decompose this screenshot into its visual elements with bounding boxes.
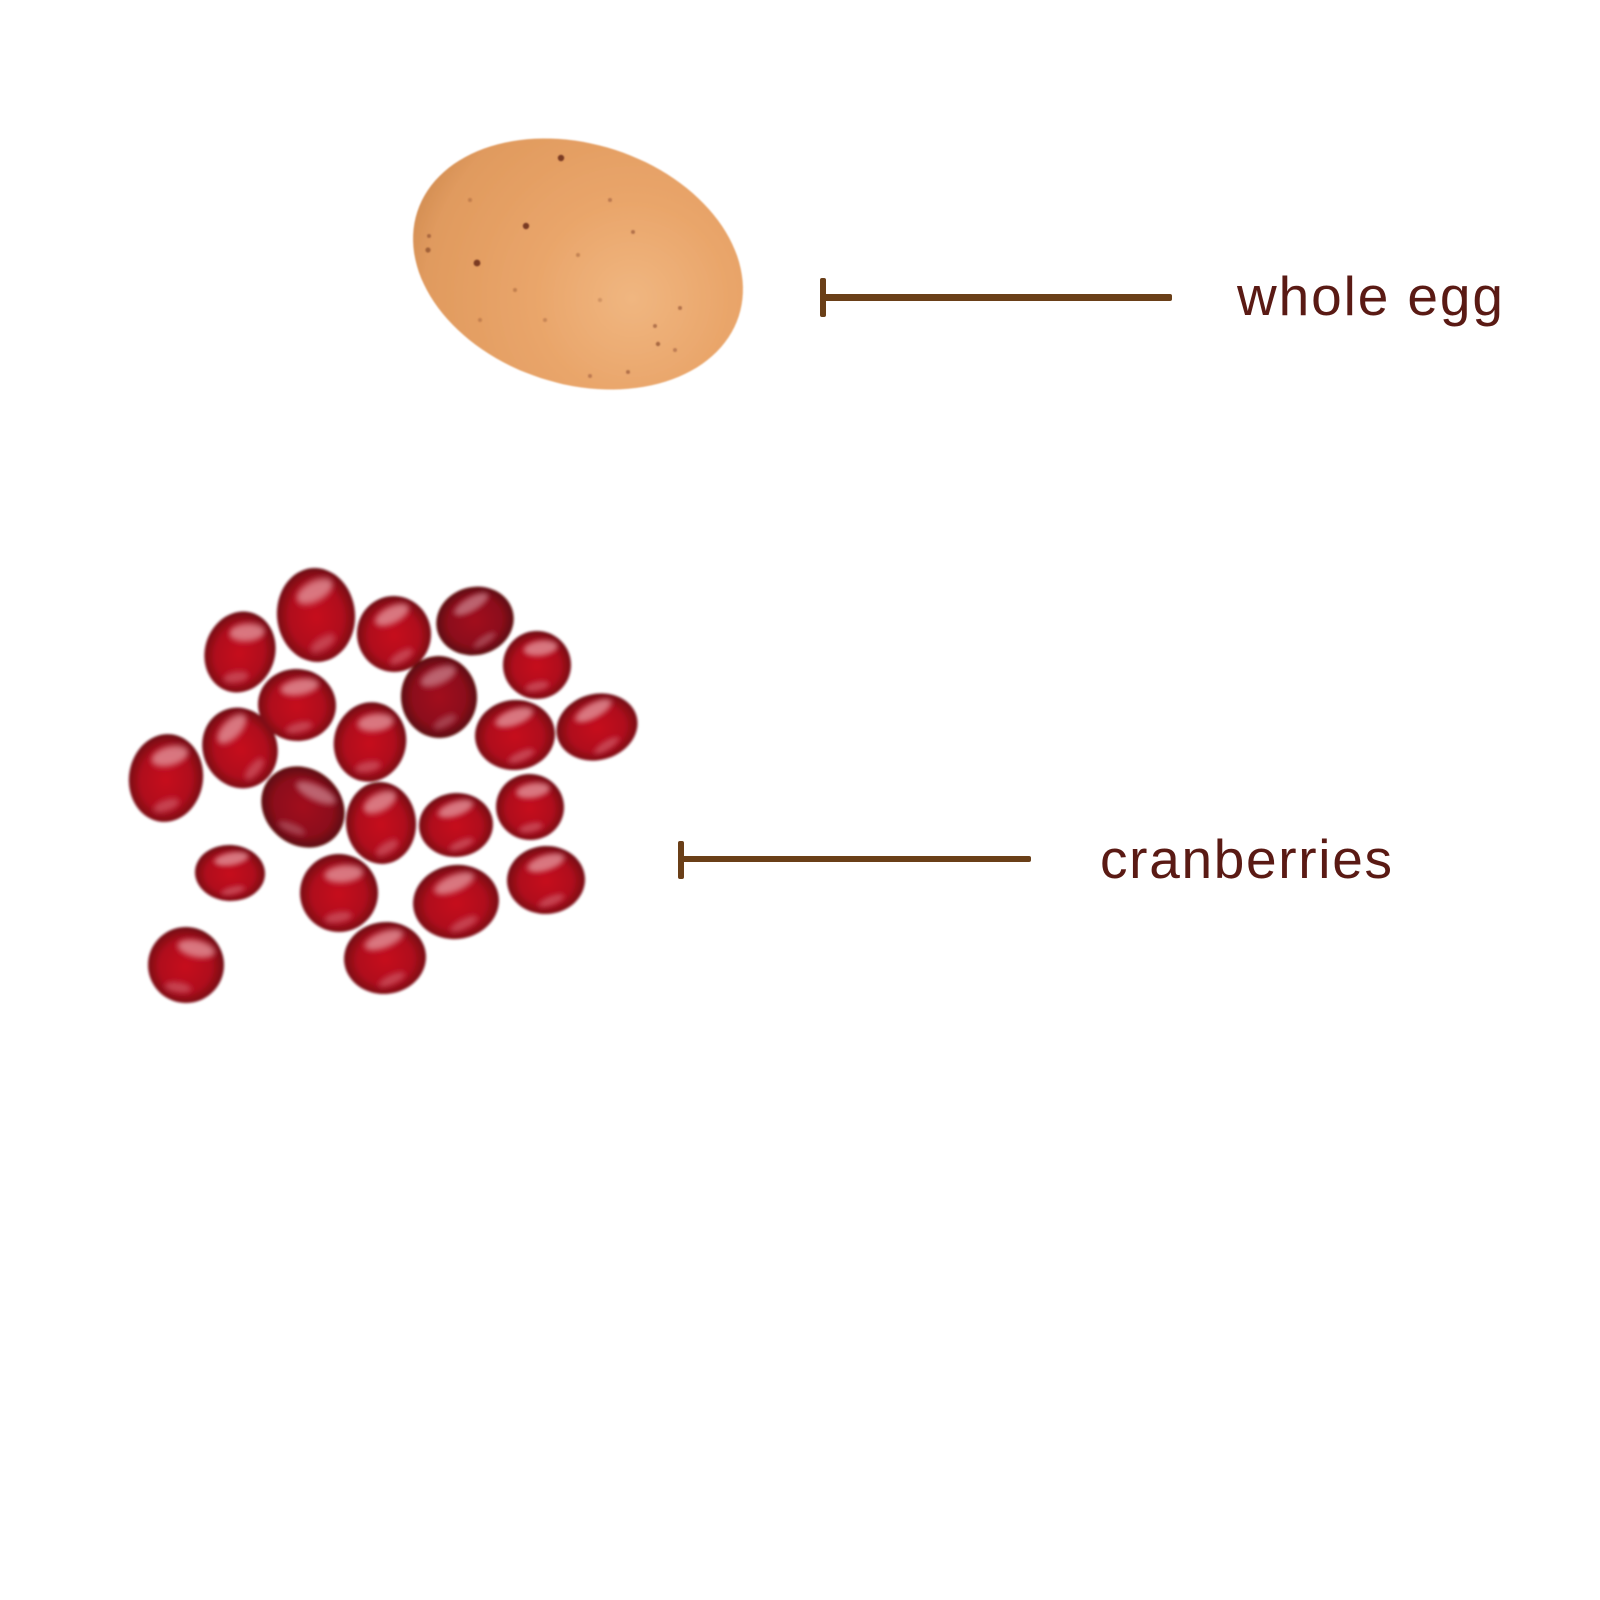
berry [293,847,385,939]
berry [408,859,504,945]
berry [134,913,238,1017]
leader line: whole egg [820,278,1172,317]
berry [123,729,209,827]
label: whole egg: whole egg [1236,265,1503,327]
icon: cranberries cluster [123,565,645,1017]
berry [498,626,576,704]
berry [472,697,558,773]
berry [352,591,436,677]
dark berry [398,653,480,741]
berry [549,685,645,769]
label: cranberries: cranberries [1100,828,1392,890]
egg speckles [425,155,682,378]
dark berry [245,750,361,864]
berry [325,694,415,790]
berry [492,770,568,844]
berry [340,918,430,998]
berry [343,779,419,867]
berry [189,695,291,801]
berry [194,602,286,702]
dark berry [429,578,521,664]
icon: whole egg [380,98,776,430]
berry [505,844,587,916]
berry [254,665,340,745]
berry [194,843,266,903]
berry [273,565,359,665]
berry [417,790,495,860]
leader line: cranberries [678,841,1031,879]
